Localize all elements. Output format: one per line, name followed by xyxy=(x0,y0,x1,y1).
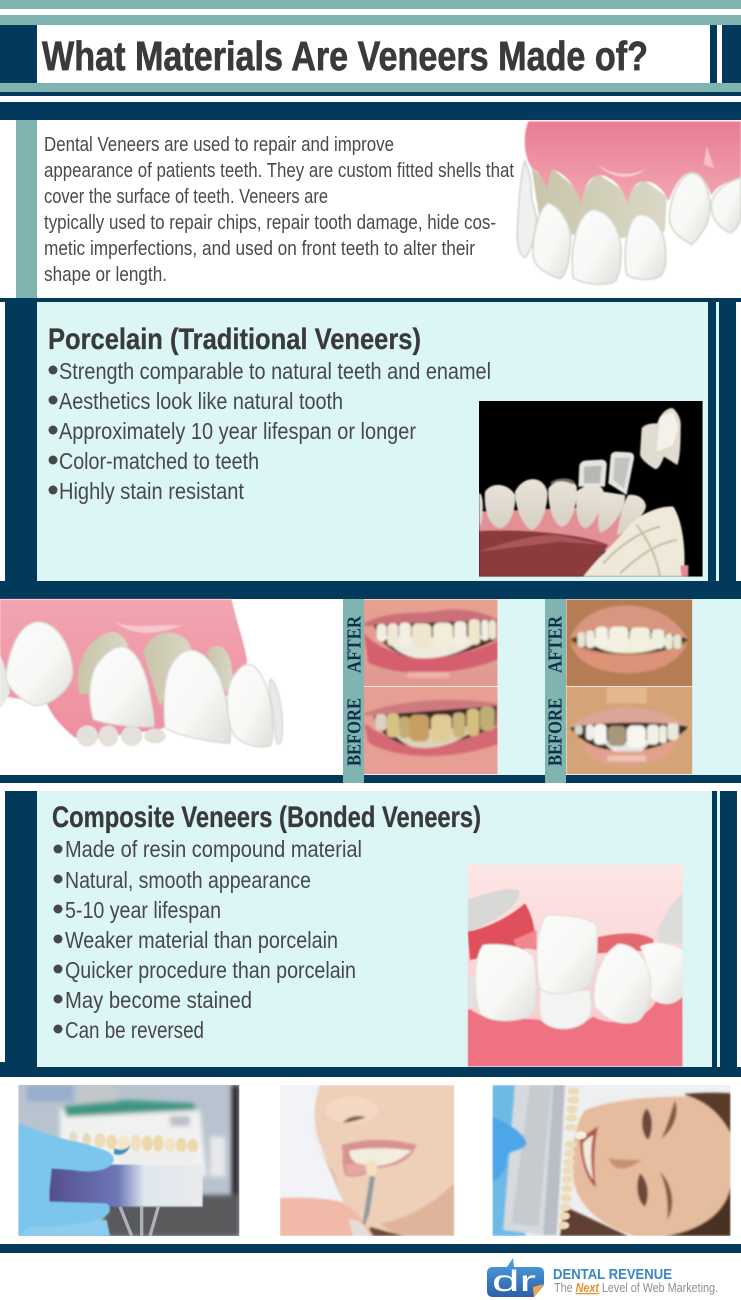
label: after, second case: AFTER xyxy=(544,616,566,673)
photo: gloved hand holding shade guide xyxy=(18,1085,240,1237)
photo: woman having tooth shade matched xyxy=(492,1085,731,1236)
icon: dr logo mark: dr xyxy=(492,1265,536,1298)
intro text xyxy=(44,134,514,286)
panel: porcelain veneers xyxy=(0,298,741,599)
panel: introduction xyxy=(16,120,741,298)
label: before, second case: BEFORE xyxy=(544,698,566,766)
list: porcelain benefits: Strength comparable to natural teeth and enamel xyxy=(59,358,491,384)
list: composite properties: Natural, smooth appearance xyxy=(65,867,311,893)
list: composite properties: 5-10 year lifespan xyxy=(65,897,221,923)
intro text: cover the surface of teeth. Veneers are xyxy=(44,186,328,208)
image: composite veneer being placed xyxy=(468,864,683,1067)
company name: DENTAL REVENUE xyxy=(553,1266,672,1283)
intro text: shape or length. xyxy=(44,264,167,286)
intro text: typically used to repair chips, repair tooth damage, hide cos- xyxy=(44,212,496,234)
icon: dr logo mark xyxy=(487,1258,544,1298)
photos: first patient xyxy=(364,599,498,774)
label: before: BEFORE xyxy=(344,698,366,766)
list: porcelain benefits: Aesthetics look like natural tooth xyxy=(59,388,343,414)
list: composite properties: May become stained xyxy=(65,987,252,1013)
footer band xyxy=(0,1244,741,1253)
photo: shade tab held to smiling mouth xyxy=(280,1085,454,1236)
intro text: Dental Veneers are used to repair and improve xyxy=(44,134,394,156)
panel: before and after comparisons xyxy=(0,599,741,783)
list: composite properties: Weaker material than porcelain xyxy=(65,927,338,953)
intro text: metic imperfections, and used on front teeth to alter their xyxy=(44,238,475,260)
photos: second patient xyxy=(566,599,692,774)
list: composite properties xyxy=(54,836,362,1043)
list: composite properties: Can be reversed xyxy=(65,1017,204,1043)
heading: composite: Composite Veneers (Bonded Veneers) xyxy=(52,801,481,834)
list: composite properties: Made of resin compound material xyxy=(65,836,362,862)
list: porcelain benefits: Color-matched to teeth xyxy=(59,448,259,474)
list: porcelain benefits: Highly stain resistant xyxy=(59,478,245,504)
label: after: AFTER xyxy=(344,616,366,673)
intro text: appearance of patients teeth. They are custom fitted shells that xyxy=(44,160,514,182)
panel: composite veneers xyxy=(0,791,741,1298)
list: composite properties: Quicker procedure than porcelain xyxy=(65,957,356,983)
tagline: The Next Level of Web Marketing. xyxy=(554,1281,718,1295)
heading: porcelain: Porcelain (Traditional Veneers) xyxy=(48,323,421,356)
title banner xyxy=(0,0,741,120)
list: porcelain benefits: Approximately 10 year lifespan or longer xyxy=(59,418,416,444)
list: porcelain benefits xyxy=(48,358,491,504)
illustration: side view of veneers xyxy=(0,599,283,747)
logo: Dental Revenue xyxy=(487,1258,718,1298)
image: veneers placed on lower teeth xyxy=(479,401,703,577)
illustration: upper teeth with veneers xyxy=(517,121,741,284)
